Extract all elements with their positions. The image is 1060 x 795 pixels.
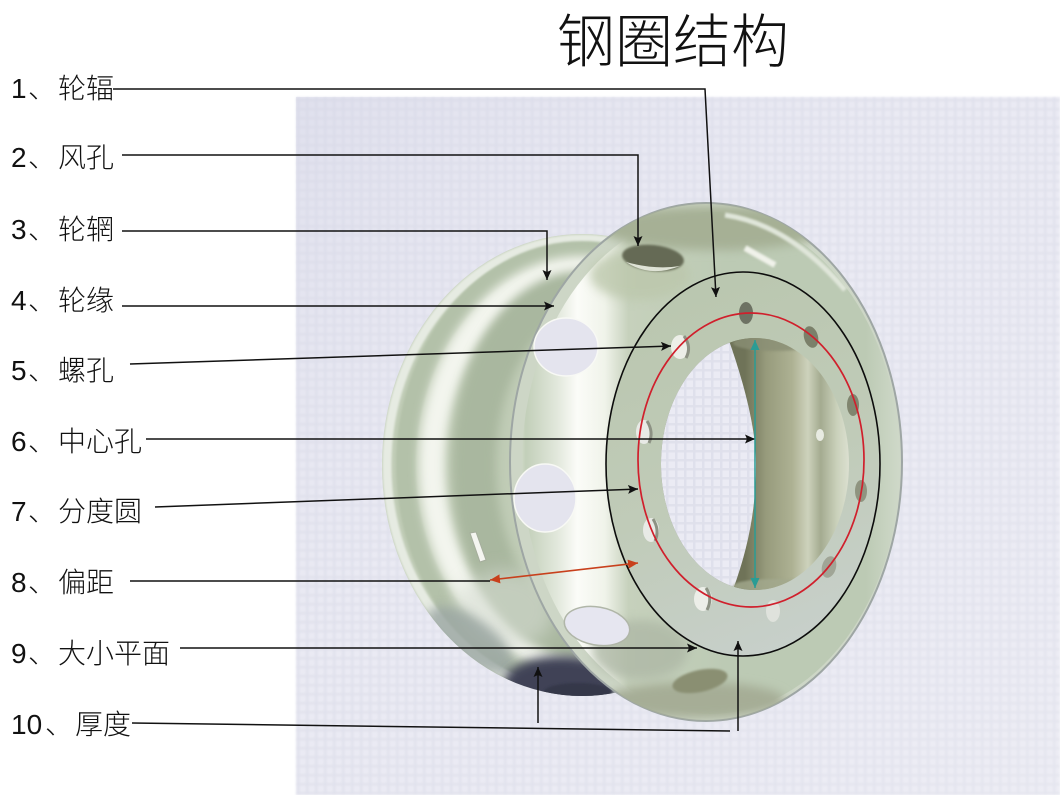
bolt holes: [636, 302, 867, 622]
label 7: 、: [28, 496, 56, 527]
arrow 6: [146, 438, 755, 440]
arrow 7: [155, 489, 638, 507]
inner well of the rim: [522, 206, 900, 718]
vent hole: upper left: [534, 318, 598, 376]
label 10: 厚度: [75, 709, 131, 740]
arrow 5: [130, 346, 671, 364]
label 5: 、: [28, 355, 56, 386]
label 2: 、: [28, 142, 56, 173]
label 10: 、: [45, 709, 73, 740]
arrow 9: [180, 647, 697, 649]
label 7: 7: [11, 496, 27, 527]
arrow 2: [122, 155, 638, 246]
label 6: 6: [11, 426, 27, 457]
center bore: [661, 338, 849, 590]
label 1: 、: [28, 73, 56, 104]
label 1: 1: [11, 73, 27, 104]
bolt circle (red): [638, 313, 864, 607]
vent hole: middle left: [514, 464, 576, 532]
offset double arrow (red): [490, 563, 638, 580]
label 2: 风孔: [58, 142, 114, 173]
label 3: 、: [28, 214, 56, 245]
title: 钢圈结构: [557, 10, 789, 75]
label 9: 大小平面: [58, 638, 170, 669]
valve slot: [470, 532, 486, 562]
label 9: 9: [11, 638, 27, 669]
label 9: 、: [28, 638, 56, 669]
label 7: 分度圆: [58, 496, 142, 527]
label 5: 螺孔: [58, 355, 114, 386]
label 10: 10: [11, 709, 42, 740]
arrow 10: [132, 723, 730, 731]
label 8: 8: [11, 567, 27, 598]
vent hole: bottom: [670, 664, 730, 698]
label 6: 中心孔: [58, 426, 142, 457]
label 6: 、: [28, 426, 56, 457]
label 1: 轮辐: [58, 73, 114, 104]
mounting disc: [606, 272, 880, 656]
arrow 4: [122, 305, 554, 307]
arrow 8: [130, 580, 490, 582]
thickness arrow left: [537, 667, 539, 723]
photo backdrop panel: [296, 97, 1060, 795]
bore diameter arrow (teal): [754, 340, 756, 588]
label 4: 轮缘: [58, 285, 114, 316]
vent hole: top: [621, 242, 685, 274]
steel wheel rim photo: [380, 203, 902, 721]
label 2: 2: [11, 142, 27, 173]
thickness arrow right: [737, 641, 739, 731]
arrow 3: [122, 231, 547, 280]
label 4: 4: [11, 285, 27, 316]
label 8: 偏距: [58, 567, 114, 598]
disc outline (black): [606, 272, 880, 656]
vent hole: lower: [561, 602, 633, 650]
label 5: 5: [11, 355, 27, 386]
label 3: 轮辋: [58, 214, 114, 245]
front flange outer lip: [510, 203, 902, 721]
rear drum of the rim: [382, 234, 616, 696]
arrow 1: [113, 89, 716, 297]
label 3: 3: [11, 214, 27, 245]
label 8: 、: [28, 567, 56, 598]
label 4: 、: [28, 285, 56, 316]
